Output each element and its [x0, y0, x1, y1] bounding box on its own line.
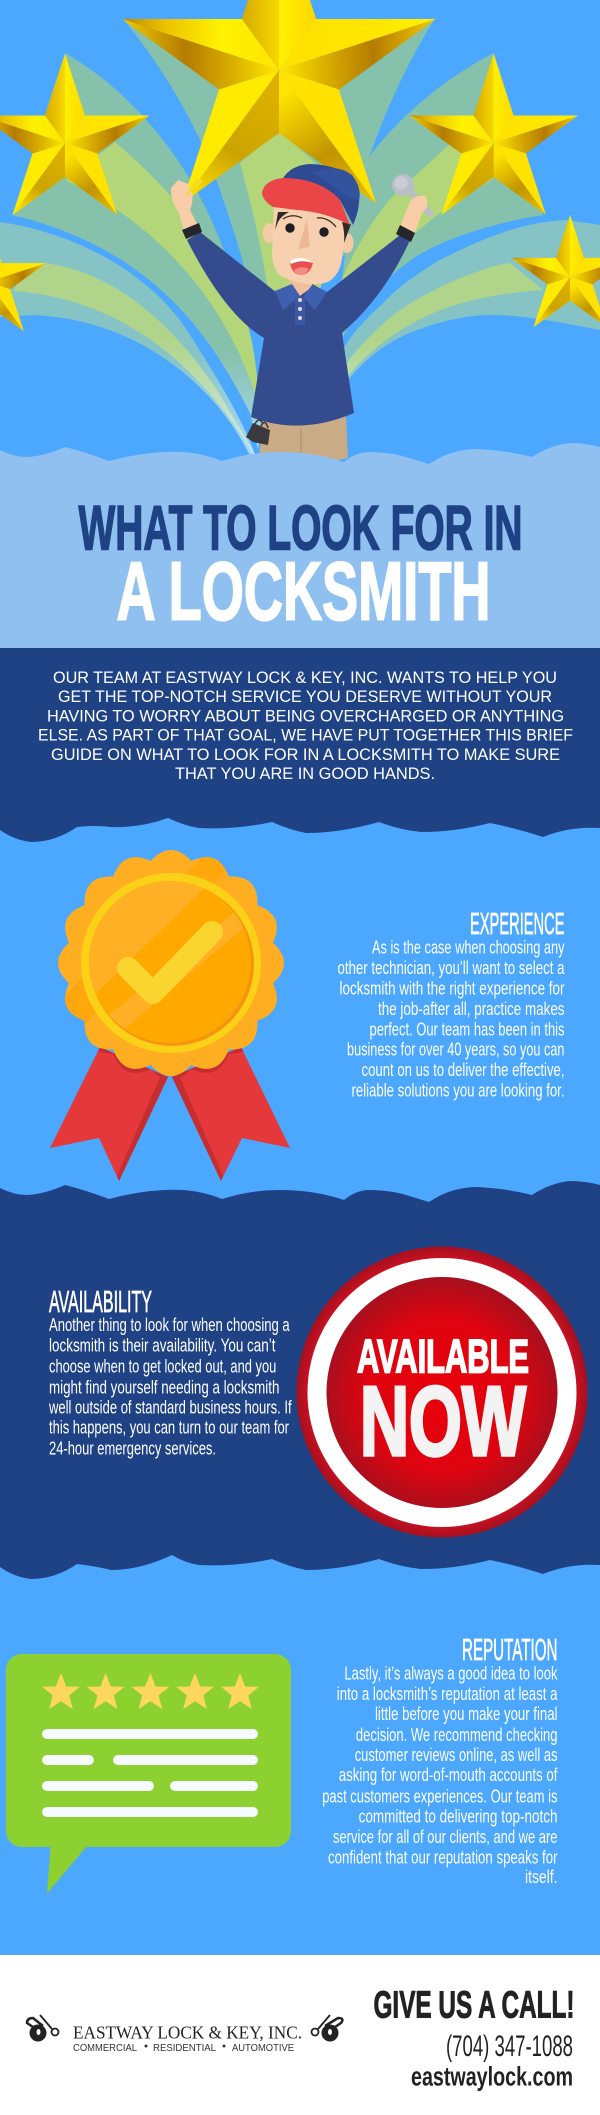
icon: available now button: NOW [360, 1366, 526, 1476]
checkmark [128, 932, 212, 993]
ribbons [50, 1048, 290, 1181]
title [78, 494, 522, 638]
left forearm and hand [171, 180, 198, 231]
tagline: AUTOMOTIVE [232, 2042, 294, 2054]
intro text: THAT YOU ARE IN GOOD HANDS. [175, 764, 435, 783]
text: reputation body: itself. [525, 1867, 558, 1887]
light rays fan [0, 20, 600, 460]
icon: award badge with ribbons [50, 850, 290, 1181]
ears [262, 223, 354, 253]
text: availability body: Another thing to look for when choosing a [49, 1315, 290, 1335]
text: availability body [48, 1315, 292, 1458]
icon: big gold star [122, 0, 436, 203]
intro text: GUIDE ON WHAT TO LOOK FOR IN A LOCKSMITH TO MAKE SURE [51, 745, 560, 764]
face [272, 205, 347, 284]
badge ring [81, 873, 261, 1053]
panel: title wave band [0, 443, 600, 650]
text: availability body: might find yourself needing a locksmith [49, 1377, 279, 1397]
pants [259, 416, 348, 462]
text: experience body [338, 937, 565, 1101]
eyes and brows [283, 216, 336, 237]
panel: availability band [0, 1181, 600, 1579]
call to action contact block [374, 1984, 574, 2092]
icon: far left gold star [0, 221, 46, 331]
tagline: COMMERCIAL [73, 2042, 137, 2054]
intro text: HAVING TO WORRY ABOUT BEING OVERCHARGED OR ANYTHING [47, 706, 564, 725]
right cuff [396, 225, 415, 242]
text: availability body: locksmith is their availability. You can’t [49, 1336, 276, 1356]
tagline [73, 2042, 294, 2054]
text: reputation body [322, 1663, 558, 1887]
logo: Eastway Lock & Key [27, 2015, 342, 2054]
logo: Eastway Lock & Key: EASTWAY LOCK & KEY, INC. [73, 2022, 302, 2042]
nose [298, 220, 310, 249]
text: availability body: this happens, you can turn to our team for [49, 1417, 289, 1437]
collar [275, 284, 327, 325]
intro text: ELSE. AS PART OF THAT GOAL, WE HAVE PUT TOGETHER THIS BRIEF [38, 726, 573, 745]
padlock [246, 420, 270, 445]
intro text: OUR TEAM AT EASTWAY LOCK & KEY, INC. WANTS TO HELP YOU [53, 668, 557, 687]
icon: left gold star [0, 54, 150, 215]
intro text [38, 668, 573, 783]
icon: available now button [296, 1246, 588, 1538]
key [392, 174, 434, 218]
locksmith character [171, 164, 434, 462]
icon: left padlock and key [27, 2015, 58, 2042]
icon: far right gold star [511, 215, 600, 327]
left cuff [182, 223, 202, 239]
text: availability body: choose when to get locked out, and you [49, 1356, 276, 1376]
hair [275, 212, 351, 243]
cap bill [262, 178, 350, 225]
heading: availability: AVAILABILITY [49, 1284, 152, 1319]
icon: review speech bubble [6, 1654, 291, 1894]
cap crown [282, 164, 359, 225]
icon: right padlock and key [312, 2015, 342, 2042]
icon: right gold star [409, 54, 578, 215]
intro text: GET THE TOP-NOTCH SERVICE YOU DESERVE WITHOUT YOUR [58, 687, 552, 706]
hero illustration: stars, rays and locksmith [0, 0, 600, 462]
mouth [290, 258, 313, 275]
right forearm and hand [400, 196, 427, 232]
five rating stars [42, 1673, 259, 1709]
star tip over fingers [185, 178, 204, 197]
neck [290, 278, 312, 296]
text: availability body: well outside of standard business hours. If [48, 1397, 292, 1417]
tagline: RESIDENTIAL [153, 2042, 216, 2054]
text: availability body: 24-hour emergency services. [49, 1438, 216, 1458]
shirt [187, 232, 410, 426]
badge scalloped edge [58, 850, 284, 1076]
review text lines [42, 1729, 258, 1817]
panel: footer [0, 1955, 600, 2115]
panel: intro band [0, 648, 600, 842]
